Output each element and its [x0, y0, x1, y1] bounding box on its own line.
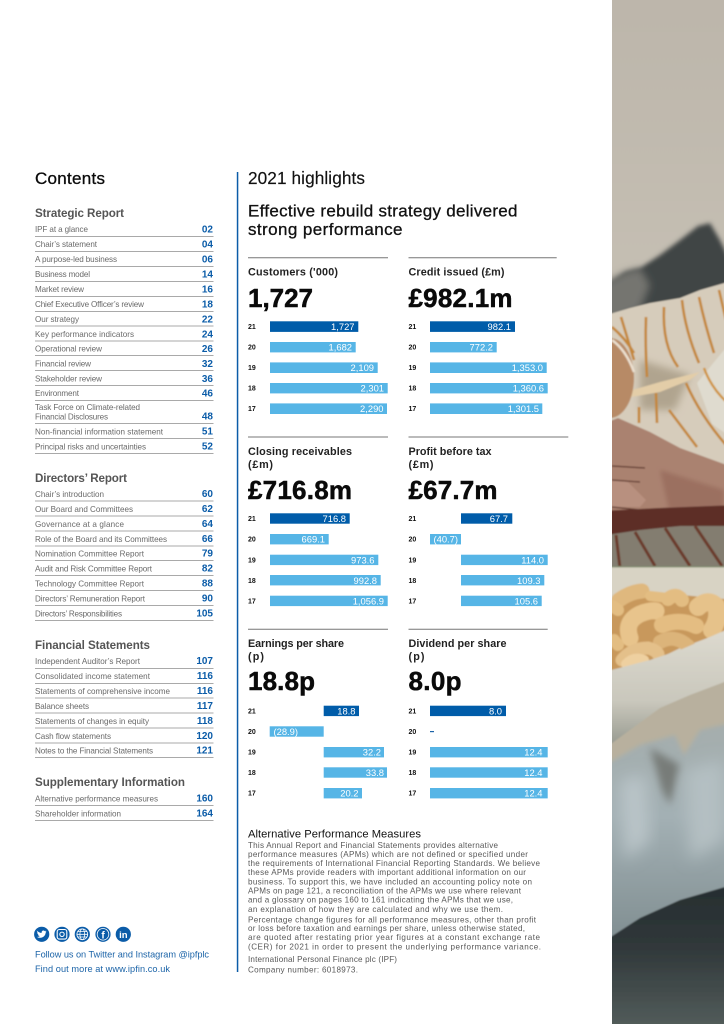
icon: facebook: f [101, 931, 105, 942]
section: Strategic Report: Strategic Report [35, 207, 124, 220]
bar chart: profit before tax: 114.0 [521, 554, 544, 566]
section: Strategic Report: 22 [202, 314, 213, 326]
bar chart: profit before tax: 18 [408, 578, 416, 585]
text block: Alternative Performance Measures: business. To support this, we have included an accounting policy note on [248, 878, 532, 886]
text block: Alternative Performance Measures: or loss before taxation and earnings per share, unless otherwise stated, [248, 924, 525, 933]
bar chart: closing receivables [248, 513, 388, 606]
section: Financial Statements: 116 [197, 686, 213, 697]
section: Strategic Report: Chair’s statement [35, 240, 98, 249]
panel: credit issued: Credit issued (£m) [408, 267, 505, 279]
panel: dividend per share: (p) [408, 651, 425, 663]
section: Directors' Report: 60 [202, 489, 213, 500]
text block: Alternative Performance Measures: Company number: 6018973. [248, 966, 358, 974]
bar chart: closing receivables: 716.8 [323, 513, 346, 524]
bar chart: earnings per share: 18 [248, 770, 256, 777]
bar chart: credit issued: 21 [408, 324, 416, 331]
text block: Alternative Performance Measures: (CER) for 2021 in order to present the underlying performance variance. [248, 942, 541, 952]
section: Strategic Report: 16 [202, 284, 213, 296]
section: Strategic Report: Financial review [35, 360, 91, 368]
section: Directors' Report: 64 [202, 519, 213, 530]
bar chart: closing receivables: 992.8 [354, 575, 377, 586]
section: Directors' Report: Directors’ Responsibilities [35, 610, 122, 618]
bar chart: dividend per share: 19 [408, 750, 416, 756]
panel: dividend per share: 8.0p [408, 666, 462, 696]
section: Financial Statements: Consolidated income statement [35, 672, 151, 681]
section: Supplementary Information [35, 776, 214, 820]
text block: Alternative Performance Measures: Percentage change figures for all performance measures, other than profit [248, 916, 537, 924]
section: Directors' Report: 62 [202, 504, 213, 515]
bar chart: credit issued [408, 321, 548, 414]
bar chart: customers: 20 [248, 344, 256, 352]
bar chart: customers: 2,301 [361, 382, 384, 394]
bar chart: earnings per share: 20 [248, 729, 256, 736]
section: Supplementary Information: 160 [196, 794, 213, 804]
section: Financial Statements: Statements of changes in equity [35, 717, 150, 726]
section: Strategic Report: 36 [202, 374, 213, 385]
bar chart: closing receivables: 19 [248, 558, 256, 564]
bar chart: closing receivables: 17 [248, 598, 256, 606]
bar chart: credit issued: 17 [408, 406, 416, 413]
text block: Alternative Performance Measures: the requirements of International Financial Reporting Standards. We believe [248, 859, 540, 868]
panel: earnings per share: 18.8p [248, 666, 315, 696]
bar chart: customers: 21 [248, 324, 256, 331]
panel: credit issued: £982.1m [408, 283, 512, 313]
bar chart: profit before tax [408, 513, 548, 606]
bar chart: dividend per share: 12.4 [524, 767, 542, 778]
section: Financial Statements: 118 [197, 716, 213, 727]
bar chart: credit issued: 18 [408, 386, 416, 392]
bar chart: customers: 17 [248, 406, 256, 413]
section: Financial Statements: Notes to the Financial Statements [35, 746, 153, 756]
bar chart: earnings per share: 20.2 [340, 788, 358, 798]
bar chart: dividend per share [408, 706, 548, 798]
section: Strategic Report: Environment [35, 389, 80, 398]
text block: Alternative Performance Measures: International Personal Finance plc (IPF) [248, 955, 397, 964]
bar chart: closing receivables: 973.6 [351, 554, 374, 566]
bar chart: dividend per share: 21 [408, 708, 416, 716]
bar chart: credit issued: 1,301.5 [508, 403, 539, 414]
section: Financial Statements: Balance sheets [35, 702, 89, 711]
section: Strategic Report: 18 [202, 300, 213, 310]
section: Financial Statements: 116 [197, 671, 213, 682]
panel: closing receivables: (£m) [248, 459, 273, 471]
icon: website globe [75, 927, 90, 942]
icon: twitter [34, 927, 49, 942]
section: Strategic Report: Financial Disclosures [35, 412, 108, 422]
section: Strategic Report: Stakeholder review [35, 374, 102, 384]
panel: closing receivables [248, 437, 388, 606]
heading: 2021 highlights: 2021 highlights [248, 168, 365, 188]
bar chart: closing receivables: 20 [248, 536, 256, 544]
bar chart: dividend per share: 17 [408, 790, 416, 798]
panel: credit issued [408, 258, 557, 414]
panel: earnings per share: Earnings per share [248, 638, 344, 650]
panel: profit before tax: (£m) [408, 459, 434, 471]
section: Directors' Report: Governance at a glance [35, 520, 124, 529]
section: Financial Statements: Independent Auditor’s Report [35, 657, 141, 666]
section: Strategic Report: Business model [35, 270, 90, 279]
bar chart: earnings per share: 17 [248, 790, 256, 798]
panel: earnings per share: (p) [248, 651, 264, 663]
bar chart: closing receivables: 669.1 [302, 534, 325, 544]
section: Strategic Report: Chief Executive Officer’s review [35, 300, 144, 309]
social text [35, 950, 209, 974]
bar chart: profit before tax: 21 [408, 516, 416, 523]
bar chart: profit before tax: 67.7 [490, 513, 508, 524]
panel: contents [35, 169, 214, 820]
section: Strategic Report: Key performance indicators [35, 330, 134, 339]
bar chart: closing receivables: 18 [248, 578, 256, 585]
section: Directors' Report: 90 [202, 594, 213, 604]
panel: profit before tax: Profit before tax [408, 446, 492, 458]
section: Directors' Report: Our Board and Committees [35, 505, 133, 514]
section: Strategic Report: 14 [202, 270, 213, 280]
bar chart: credit issued: 772.2 [470, 342, 493, 352]
bar chart: profit before tax: 20 [408, 536, 416, 544]
text block: Alternative Performance Measures: an explanation of how they are calculated and why we use them. [248, 905, 503, 914]
bar chart: customers: 1,682 [329, 342, 352, 352]
heading: strategy headline: strong performance [248, 220, 402, 239]
section: Directors' Report: 79 [202, 548, 213, 560]
section: Strategic Report: Task Force on Climate-related [35, 403, 140, 412]
social text: Find out more at www.ipfin.co.uk [35, 964, 170, 974]
section: Supplementary Information: Alternative performance measures [35, 794, 158, 804]
bar chart: profit before tax: 105.6 [515, 596, 538, 606]
bar chart: credit issued: 1,353.0 [512, 362, 543, 373]
section: Strategic Report: IPF at a glance [35, 225, 88, 234]
section: Directors' Report: Audit and Risk Committee Report [35, 564, 153, 574]
section: Directors' Report: 82 [202, 564, 213, 574]
panel: earnings per share [248, 629, 388, 798]
section: Financial Statements: Cash flow statements [35, 732, 111, 741]
bar chart: profit before tax: 17 [408, 598, 416, 606]
social text: Follow us on Twitter and Instagram @ipfplc [35, 950, 209, 960]
bar chart: customers: 2,109 [351, 362, 374, 373]
section: Directors' Report [35, 472, 214, 620]
panel: customers [248, 258, 388, 414]
section: Supplementary Information: Supplementary Information [35, 776, 185, 789]
panel: profit before tax: £67.7m [408, 475, 498, 505]
bar chart: customers: 1,727 [331, 321, 354, 332]
bar chart: closing receivables: 21 [248, 516, 256, 523]
panel: closing receivables: £716.8m [248, 475, 352, 505]
section: Financial Statements: Financial Statements [35, 639, 150, 652]
section: Directors' Report: 88 [202, 578, 213, 590]
section: Strategic Report: 46 [202, 388, 213, 400]
divider: vertical blue rule [237, 172, 238, 972]
bar chart: dividend per share: 12.4 [524, 746, 542, 758]
section: Financial Statements: 121 [196, 746, 213, 756]
bar chart: dividend per share: 8.0 [489, 706, 502, 716]
text block: Alternative Performance Measures: these APMs provide readers with important additional information on our [248, 868, 526, 877]
text block: Alternative Performance Measures [248, 828, 541, 974]
section: Directors' Report: Directors’ Remuneration Report [35, 594, 146, 604]
section: Directors' Report: 66 [202, 534, 213, 545]
section: Directors' Report: Directors’ Report [35, 472, 127, 485]
section: Strategic Report [35, 207, 214, 454]
text block: Alternative Performance Measures: APMs on page 121, a reconciliation of the APMs we use where relevant [248, 886, 522, 895]
section: Strategic Report: 26 [202, 344, 213, 355]
bar chart: credit issued: 1,360.6 [513, 382, 544, 394]
section: Directors' Report: Nomination Committee Report [35, 550, 145, 558]
panel: customers: Customers ('000) [248, 267, 338, 279]
bar chart: dividend per share: 20 [408, 729, 416, 736]
section: Strategic Report: 04 [202, 240, 213, 250]
bar chart: earnings per share: (28.9) [274, 726, 298, 737]
text block: Alternative Performance Measures: This Annual Report and Financial Statements provides alternative [248, 841, 498, 850]
section: Strategic Report: A purpose-led business [35, 255, 117, 264]
bar chart: dividend per share: 12.4 [524, 788, 542, 798]
section: Directors' Report: 105 [196, 608, 213, 620]
section: Directors' Report: Role of the Board and its Committees [35, 535, 167, 544]
bar chart: credit issued: 20 [408, 344, 416, 352]
bar chart: earnings per share: 18.8 [337, 706, 356, 716]
bar chart: earnings per share: 33.8 [366, 767, 384, 778]
text block: Alternative Performance Measures: Alternative Performance Measures [248, 828, 421, 840]
photo: person holding a bowl of snacks [612, 0, 724, 1024]
section: Supplementary Information: 164 [196, 808, 213, 820]
section: Strategic Report: 32 [202, 359, 213, 370]
panel: dividend per share: Dividend per share [408, 638, 506, 650]
bar chart: customers [248, 321, 388, 414]
bar chart: dividend per share: 18 [408, 770, 416, 777]
section: Strategic Report: 48 [202, 412, 213, 422]
section: Strategic Report: Operational review [35, 344, 102, 354]
bar chart: closing receivables: 1,056.9 [353, 596, 384, 606]
bar chart: earnings per share: 21 [248, 708, 256, 716]
bar chart: profit before tax: 109.3 [517, 575, 540, 586]
section: Strategic Report: Principal risks and uncertainties [35, 442, 146, 452]
section: Strategic Report: 02 [202, 224, 213, 236]
panel: customers: 1,727 [248, 283, 313, 313]
bar chart: customers: 2,290 [360, 403, 384, 414]
section: Strategic Report: 52 [202, 442, 213, 452]
social icons [34, 927, 131, 942]
section: Strategic Report: Our strategy [35, 315, 80, 324]
bar chart: credit issued: 982.1 [488, 321, 511, 332]
section: Supplementary Information: Shareholder information [35, 810, 121, 818]
section: Strategic Report: 06 [202, 254, 213, 266]
section: Financial Statements: 117 [197, 701, 213, 712]
bar chart: credit issued: 19 [408, 365, 416, 372]
section: Strategic Report: 24 [202, 330, 213, 340]
bar chart: earnings per share: 32.2 [363, 746, 381, 758]
section: Financial Statements [35, 639, 214, 758]
icon: instagram [54, 927, 70, 942]
bar chart: profit before tax: 19 [408, 558, 416, 564]
section: Strategic Report: 51 [202, 426, 213, 438]
text block: Alternative Performance Measures: are quoted after restating prior year figures at a constant exchange rate [248, 933, 540, 942]
heading: strategy headline: Effective rebuild strategy delivered [248, 202, 518, 220]
panel: profit before tax [408, 437, 568, 606]
bar chart: earnings per share: 19 [248, 750, 256, 756]
bar chart: customers: 18 [248, 386, 256, 392]
section: Directors' Report: Technology Committee Report [35, 580, 145, 588]
section: Financial Statements: 107 [196, 656, 213, 667]
section: Strategic Report: Non-financial information statement [35, 428, 164, 436]
bar chart: customers: 19 [248, 365, 256, 372]
section: Financial Statements: 120 [196, 731, 213, 742]
bar chart: profit before tax: (40.7) [434, 534, 458, 544]
panel: dividend per share [408, 629, 548, 798]
section: Strategic Report: Market review [35, 285, 84, 294]
section: Directors' Report: Chair’s introduction [35, 490, 104, 499]
heading: Contents: Contents [35, 169, 105, 188]
section: Financial Statements: Statements of comprehensive income [35, 687, 170, 696]
text block: Alternative Performance Measures: and a glossary on pages 160 to 161 indicating the APMs that we use, [248, 896, 513, 904]
bar chart: earnings per share [248, 706, 387, 798]
icon: linkedin: in [119, 930, 128, 941]
text block: Alternative Performance Measures: performance measures (APMs) which are not defined or specified under [248, 850, 528, 859]
panel: closing receivables: Closing receivables [248, 446, 352, 458]
heading: strategy headline [248, 202, 518, 239]
